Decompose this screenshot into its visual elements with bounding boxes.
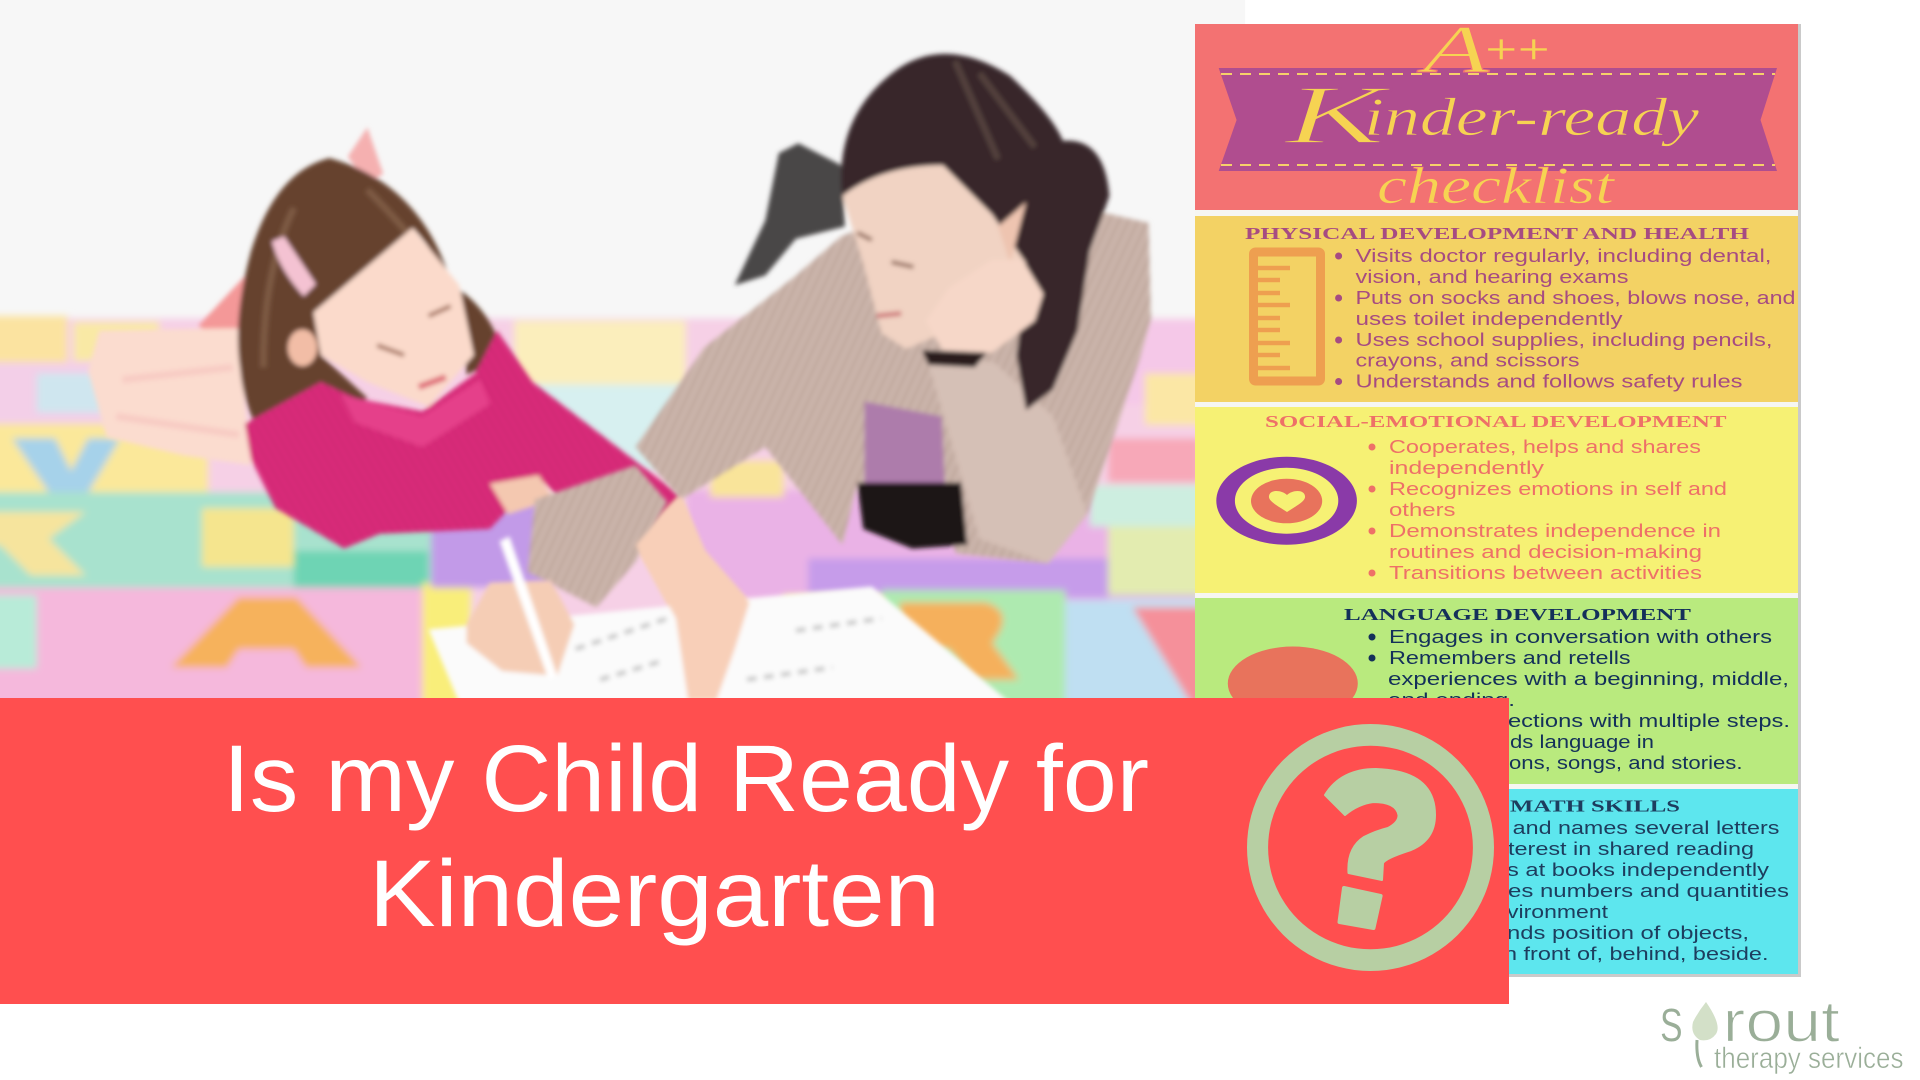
- section: physical development and health: [1195, 216, 1798, 402]
- bullet list: others: [1389, 500, 1456, 520]
- photo: mother and child on alphabet mat: [0, 48, 1195, 698]
- icon: question mark in circle: [1247, 724, 1494, 971]
- heading: A++: ++: [1485, 25, 1550, 72]
- bullet list: Look: [1389, 860, 1429, 880]
- bullet list: ons, songs, and stories.: [1509, 753, 1742, 773]
- heading: Kinder-ready: K: [1283, 69, 1392, 162]
- bullet list: n front of, behind, beside.: [1504, 944, 1768, 964]
- bullet list: routines and decision-making: [1389, 542, 1702, 562]
- bullet list: Recognizes emotions in self and: [1389, 479, 1727, 499]
- bullet list: Recognizes: [1389, 818, 1483, 838]
- heading: Kinder-ready: inder-ready: [1364, 87, 1699, 147]
- bullet list: such as i: [1389, 944, 1460, 964]
- logo: sprout therapy services: s: [1660, 987, 1683, 1056]
- icon: leaf: [1692, 1002, 1718, 1067]
- mother shirt: [864, 402, 945, 496]
- bullet list: Demonstrates independence in: [1389, 521, 1721, 541]
- title banner: [0, 698, 1509, 1004]
- bullet list: independently: [1389, 458, 1544, 478]
- bullet list: experiences with a beginning, middle,: [1388, 669, 1789, 689]
- bullet list: s at books independently: [1507, 860, 1769, 880]
- mother hand: [926, 260, 1043, 353]
- section: literacy and math skills: [1195, 789, 1798, 974]
- heading: Kinder-ready: [1283, 69, 1699, 162]
- logo: sprout therapy services: [1660, 987, 1904, 1075]
- child sweater: [245, 331, 681, 557]
- bullet list: Follows dir: [1389, 711, 1475, 731]
- bullet list: Understan: [1389, 732, 1472, 752]
- section: social-emotional development: [1195, 407, 1798, 593]
- alphabet foam mat: [0, 316, 1261, 722]
- section heading: MATH SKILLS: [1510, 797, 1680, 816]
- bullet list: conversati: [1389, 753, 1471, 773]
- bullet list: Visits doctor regularly, including dental,: [1356, 246, 1772, 266]
- bullet list: Shows in: [1389, 839, 1462, 859]
- worksheet: [429, 496, 1010, 703]
- section heading: LITERACY AND: [1330, 797, 1500, 816]
- bullet list: vironment: [1507, 902, 1608, 922]
- child hair: [238, 158, 504, 451]
- hair clip: [272, 236, 316, 296]
- mother sweater: [636, 208, 1151, 563]
- bullet list: Transitions between activities: [1389, 563, 1702, 583]
- bullet list: Understands and follows safety rules: [1356, 372, 1742, 392]
- mother hair: [841, 54, 1109, 410]
- bullet list: Understa: [1389, 923, 1463, 943]
- panel: Kinder-ready checklist: [1195, 11, 1801, 977]
- heading: A++: [1417, 11, 1550, 87]
- bullet list: uses toilet independently: [1356, 309, 1622, 329]
- mother figure: [528, 54, 1151, 607]
- child figure: [88, 127, 746, 604]
- child face: [313, 228, 474, 407]
- bullet list: crayons, and scissors: [1356, 350, 1580, 370]
- ribbon banner: [1219, 68, 1777, 171]
- heading: checklist: checklist: [1377, 158, 1616, 215]
- bullet list: [1335, 246, 1796, 392]
- bullet list: Puts on socks and shoes, blows nose, and: [1356, 288, 1796, 308]
- mother arm to page: [528, 465, 667, 607]
- bullet list: ds language in: [1510, 732, 1654, 752]
- bullet list: [1368, 437, 1727, 583]
- bullet list: Recogniz: [1389, 881, 1464, 901]
- bullet list: [1389, 818, 1789, 964]
- child's hand: [636, 496, 749, 700]
- section heading: [1330, 797, 1680, 816]
- mother face: [842, 165, 1026, 349]
- section heading: PHYSICAL DEVELOPMENT AND HEALTH: [1245, 224, 1749, 243]
- bullet list: vision, and hearing exams: [1356, 267, 1628, 287]
- heading: A++: A: [1417, 11, 1490, 87]
- bullet list: in the en: [1389, 902, 1458, 922]
- bullet list: Remembers and retells: [1389, 648, 1631, 668]
- bullet list: and ending.: [1388, 690, 1515, 710]
- section: language development: [1195, 598, 1798, 784]
- bullet list: es numbers and quantities: [1508, 881, 1789, 901]
- section heading: SOCIAL-EMOTIONAL DEVELOPMENT: [1265, 412, 1727, 431]
- title text: Kindergarten: [369, 841, 940, 947]
- bullet list: and names several letters: [1513, 818, 1779, 838]
- icon: heart target: [1216, 457, 1357, 545]
- bullet list: [1368, 627, 1790, 773]
- section heading: LANGUAGE DEVELOPMENT: [1344, 605, 1692, 624]
- bullet list: Cooperates, helps and shares: [1389, 437, 1701, 457]
- checklist header: [1195, 11, 1798, 215]
- title text: [223, 726, 1149, 947]
- icon: ruler: [1254, 252, 1320, 381]
- logo: sprout therapy services: rout: [1723, 990, 1840, 1055]
- bullet list: ections with multiple steps.: [1508, 711, 1790, 731]
- bullet list: Engages in conversation with others: [1389, 627, 1772, 647]
- bullet list: nds position of objects,: [1507, 923, 1749, 943]
- bullet list: Uses school supplies, including pencils,: [1356, 330, 1772, 350]
- icon: speech bubble: [1228, 646, 1358, 720]
- title text: Is my Child Ready for: [223, 726, 1149, 832]
- bullet list: terest in shared reading: [1508, 839, 1754, 859]
